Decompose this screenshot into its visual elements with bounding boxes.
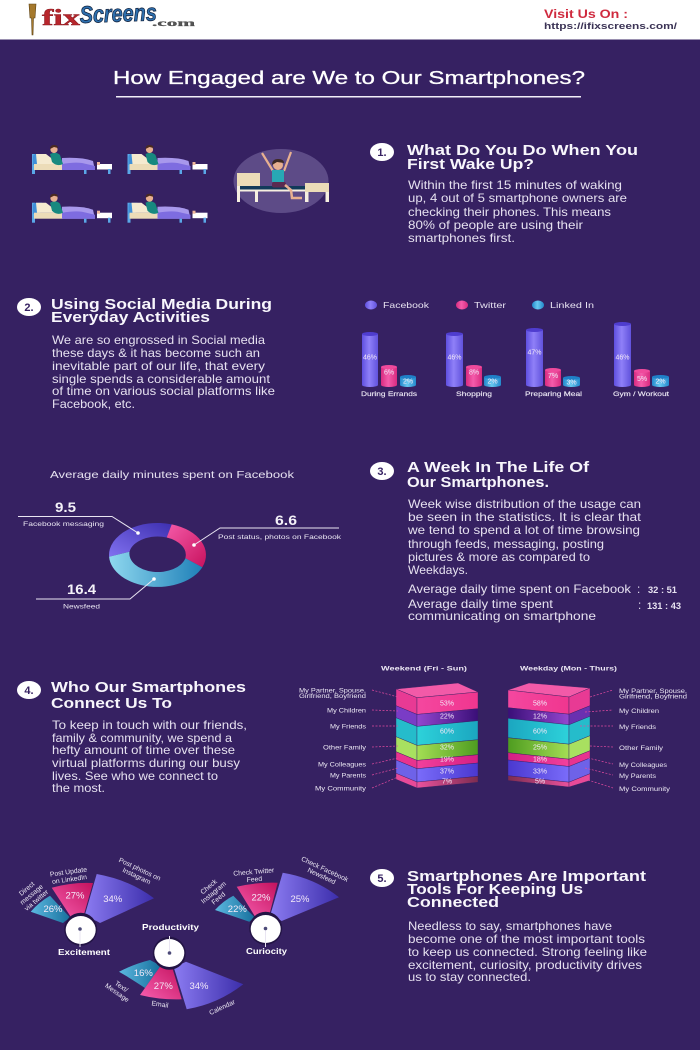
fan chart: excitement: on LinkedIn <box>52 874 88 886</box>
productivity label: Productivity <box>142 922 199 932</box>
stat: smartphone time: : <box>638 599 641 612</box>
stat: smartphone time <box>408 598 681 623</box>
section 3 heading: Our Smartphones. <box>407 475 549 491</box>
icon: person waking up on bed <box>234 149 329 213</box>
section 5 number badge <box>370 869 394 887</box>
section 3 body <box>407 498 642 577</box>
weekend stack <box>396 683 478 788</box>
stacked chart: weekday <box>508 666 687 793</box>
section 3 body: be seen in the statistics. It is clear that <box>408 511 642 524</box>
section 1 body: up, 4 out of 5 smartphone owners are <box>408 192 627 205</box>
bar chart legend: Twitter <box>474 300 506 310</box>
weekend percentages: 22% <box>440 714 454 720</box>
section 2 body <box>52 334 275 411</box>
fan chart: productivity: Text/ <box>113 980 129 994</box>
section 2 body: inevitable part of our life, that every <box>52 360 265 373</box>
fan chart: curiosity: Check Twitter <box>233 867 275 878</box>
fan chart: excitement: 27% <box>65 890 85 902</box>
stat: smartphone time: 131 : 43 <box>647 601 681 611</box>
weekend labels <box>299 688 367 792</box>
section 3 number badge: 3. <box>377 466 387 478</box>
fan chart: excitement: Post photos on <box>117 857 162 883</box>
bars: shopping <box>446 332 501 398</box>
callout: post status: 6.6 <box>275 512 297 528</box>
weekend percentages <box>440 700 454 786</box>
fan chart: curiosity: Check <box>200 878 219 896</box>
section 3 heading: A Week In The Life Of <box>407 460 589 476</box>
section 4 number badge: 4. <box>24 685 34 697</box>
section 1 body: 80% of people are using their <box>408 219 583 232</box>
bars: during errands: 2% <box>403 378 413 386</box>
bars: during errands: 6% <box>384 370 394 376</box>
section 5 body: to keep us connected. Strong feeling like <box>408 946 647 959</box>
fan chart: excitement: message <box>19 883 45 907</box>
donut chart <box>18 499 342 610</box>
weekday labels: My Parents <box>619 773 657 780</box>
section 5 heading: Connected <box>407 895 499 911</box>
bars: during errands: During Errands <box>361 391 418 398</box>
weekend percentages: 19% <box>440 756 454 764</box>
fan chart: excitement: via twitter <box>24 888 51 913</box>
weekend labels: My Partner, Spouse, <box>299 688 366 694</box>
weekend labels: My Friends <box>330 724 367 730</box>
section 3 number badge <box>370 462 394 480</box>
section 5 body: excitement, curiosity, productivity drives <box>408 959 642 972</box>
bars: gym / workout: 2% <box>655 378 666 386</box>
section 1 number badge: 1. <box>377 147 387 159</box>
weekday labels: My Colleagues <box>619 762 668 769</box>
excitement label: Excitement <box>58 947 110 957</box>
section 4 heading: Connect Us To <box>51 696 172 712</box>
fan chart: curiosity: Feed <box>211 891 227 906</box>
donut chart title: Average daily minutes spent on Facebook <box>50 469 295 481</box>
section 3 body: Week wise distribution of the usage can <box>408 498 641 511</box>
fan chart: productivity: 27% <box>154 981 173 992</box>
section 2 body: single spends a considerable amount <box>52 373 271 386</box>
fan chart: excitement: Post Update <box>50 866 88 879</box>
weekday percentages: 60% <box>533 728 547 736</box>
callout: newsfeed: Newsfeed <box>63 604 100 610</box>
section 2 heading: Using Social Media During <box>51 297 272 313</box>
bars: shopping: 46% <box>447 354 462 362</box>
fan chart: excitement: 34% <box>103 894 123 905</box>
weekday labels: My Children <box>619 708 659 715</box>
logo: .com <box>152 19 195 29</box>
section 1 body <box>408 179 627 245</box>
section 4 body: virtual platforms during our busy <box>52 757 240 770</box>
section 4 body: family & community, we spend a <box>52 732 233 745</box>
title: How Engaged are We to Our Smartphones? <box>113 67 585 88</box>
bars: gym / workout: Gym / Workout <box>613 391 669 398</box>
stat: facebook time: : <box>637 583 640 596</box>
section 4 body: the most. <box>52 782 105 795</box>
weekday percentages: 25% <box>533 744 547 752</box>
section 3 heading <box>407 460 589 491</box>
stat: smartphone time: Average daily time spent <box>408 598 554 611</box>
weekend percentages: 53% <box>440 700 454 708</box>
section 2 heading: Everyday Activities <box>51 310 210 326</box>
weekday percentages: 58% <box>533 700 547 708</box>
section 1 heading: First Wake Up? <box>407 157 534 173</box>
section 2 body: Facebook, etc. <box>52 398 135 411</box>
fan chart: curiosity: Feed <box>246 876 263 884</box>
callout: post status <box>192 512 342 547</box>
weekday labels <box>619 688 687 793</box>
bar chart legend <box>365 300 594 310</box>
icon: bed 3 <box>32 194 112 223</box>
section 4 body: hefty amount of time over these <box>52 744 235 757</box>
logo <box>29 0 195 35</box>
weekend labels: My Colleagues <box>318 762 367 768</box>
callout: newsfeed: 16.4 <box>67 581 96 597</box>
fan chart: curiosity: Instagram <box>200 880 228 905</box>
section 1 illustration: sleeping people <box>32 145 208 223</box>
weekday percentages: 18% <box>533 756 547 764</box>
weekend leader lines <box>372 690 398 788</box>
bars: shopping: 8% <box>469 370 479 376</box>
weekend heading: Weekend (Fri - Sun) <box>381 666 467 672</box>
bars: preparing meal: 3% <box>566 380 577 386</box>
weekend labels: My Parents <box>330 772 367 780</box>
visit us link <box>544 9 677 32</box>
bars: gym / workout <box>613 322 669 398</box>
weekday labels: Girlfriend, Boyfriend <box>619 694 687 700</box>
fan chart: productivity: 16% <box>134 968 153 979</box>
weekend percentages: 7% <box>442 778 452 786</box>
weekend percentages: 37% <box>440 768 454 776</box>
fan chart: curiosity: 22% <box>228 904 247 915</box>
fan chart: excitement: Instagram <box>121 867 152 886</box>
stacked chart: weekend <box>299 666 478 792</box>
stat: smartphone time: communicating on smartphone <box>408 610 596 623</box>
weekday labels: My Friends <box>619 724 657 731</box>
section 1 body: Within the first 15 minutes of waking <box>408 179 622 192</box>
weekday labels: My Community <box>619 786 671 793</box>
section 2 body: of time on various social platforms like <box>52 385 275 398</box>
fan chart: curiosity <box>195 856 350 956</box>
section 1 number badge <box>370 143 394 161</box>
bars: shopping: Shopping <box>456 391 492 398</box>
section 2 number badge <box>17 298 41 316</box>
bars: preparing meal: 47% <box>527 350 542 356</box>
section 2 body: We are so engrossed in Social media <box>52 334 266 347</box>
weekday heading: Weekday (Mon - Thurs) <box>520 666 617 672</box>
section 3 body: through feeds, messaging, posting <box>408 538 604 551</box>
section 5 body: become one of the most important tools <box>408 933 645 946</box>
section 2 number badge: 2. <box>24 302 34 314</box>
section 5 heading: Tools For Keeping Us <box>407 882 583 898</box>
weekend percentages: 32% <box>440 744 454 752</box>
bar chart <box>361 322 669 398</box>
weekday percentages <box>533 700 547 786</box>
weekday percentages: 12% <box>533 714 547 720</box>
stat: facebook time: 32 : 51 <box>648 585 677 595</box>
section 5 body: us to stay connected. <box>408 971 531 984</box>
fan chart: curiosity: Newsfeed <box>306 867 337 886</box>
icon: bed 4 <box>128 194 208 223</box>
section 4 body <box>52 719 247 795</box>
weekend labels: Other Family <box>323 744 367 752</box>
weekend percentages: 60% <box>440 728 454 736</box>
fan chart: curiosity: 25% <box>290 894 310 905</box>
bar chart legend: Facebook <box>383 300 430 310</box>
fan chart: curiosity: Check Facebook <box>300 856 350 884</box>
weekday labels: Other Family <box>619 745 664 752</box>
bars: during errands: 46% <box>363 354 377 362</box>
section 5 number badge: 5. <box>377 873 387 885</box>
section 5 body <box>408 920 647 984</box>
fan chart: excitement <box>14 857 162 957</box>
callout: newsfeed <box>36 577 156 610</box>
bars: gym / workout: 5% <box>637 376 647 383</box>
fan chart: productivity: Message <box>103 982 130 1004</box>
weekend labels: My Children <box>327 708 366 714</box>
bars: preparing meal: 7% <box>548 373 558 380</box>
stat: facebook time: Average daily time spent on Facebook <box>408 583 631 596</box>
weekday percentages: 5% <box>535 778 545 786</box>
section 2 body: these days & it has become such an <box>52 347 260 360</box>
section 1 heading <box>407 143 638 173</box>
fan chart: excitement: Direct <box>18 881 36 898</box>
curiosity label: Curiocity <box>246 946 287 956</box>
bars: during errands <box>361 332 418 398</box>
fan chart: productivity <box>103 922 243 1017</box>
section 1 heading: What Do You Do When You <box>407 143 638 159</box>
icon: bed 2 <box>128 145 208 174</box>
section 4 heading: Who Our Smartphones <box>51 680 246 696</box>
bars: shopping: 2% <box>487 378 498 386</box>
logo: fix <box>42 5 81 30</box>
bars: gym / workout: 46% <box>615 354 630 362</box>
section 5 heading <box>407 869 646 911</box>
section 3 body: Weekdays. <box>408 564 468 577</box>
weekend labels: My Community <box>315 786 367 792</box>
weekday labels: My Partner, Spouse, <box>619 688 687 695</box>
visit us link: https://ifixscreens.com/ <box>544 21 677 32</box>
weekday stack <box>508 683 590 787</box>
bars: preparing meal: Preparing Meal <box>525 391 583 398</box>
fan chart: excitement: 26% <box>43 904 63 915</box>
bar chart legend: Linked In <box>550 300 594 310</box>
fan chart: curiosity: 22% <box>251 892 271 904</box>
section 4 body: To keep in touch with our friends, <box>52 719 247 732</box>
visit us link: Visit Us On : <box>544 9 628 21</box>
section 1 body: smartphones first. <box>408 232 515 245</box>
section 3 body: we tend to spend a lot of time browsing <box>407 524 640 537</box>
section 5 body: Needless to say, smartphones have <box>408 920 612 933</box>
callout: post status: Post status, photos on Facebook <box>218 534 342 541</box>
weekday percentages: 33% <box>533 768 547 776</box>
weekday leader lines <box>580 690 613 788</box>
section 2 heading <box>51 297 272 326</box>
header bar <box>0 0 700 40</box>
section 4 heading <box>51 680 246 712</box>
section 5 heading: Smartphones Are Important <box>407 869 646 885</box>
section 4 number badge <box>17 681 41 699</box>
icon: bed 1 <box>32 145 112 174</box>
section 1 body: checking their phones. This means <box>408 206 611 219</box>
section 3 body: pictures & more as compared to <box>408 551 590 564</box>
callout: facebook messaging: Facebook messaging <box>23 521 104 528</box>
fan chart: productivity: Calendar <box>208 999 237 1017</box>
section 4 body: lives. See who we connect to <box>52 770 218 783</box>
bars: preparing meal <box>525 328 583 398</box>
weekend labels: Girlfriend, Boyfriend <box>299 693 366 700</box>
fan chart: productivity: 34% <box>189 981 209 992</box>
callout: facebook messaging: 9.5 <box>55 499 76 515</box>
fan chart: productivity: Email <box>151 1000 169 1010</box>
callout: facebook messaging <box>18 499 140 535</box>
